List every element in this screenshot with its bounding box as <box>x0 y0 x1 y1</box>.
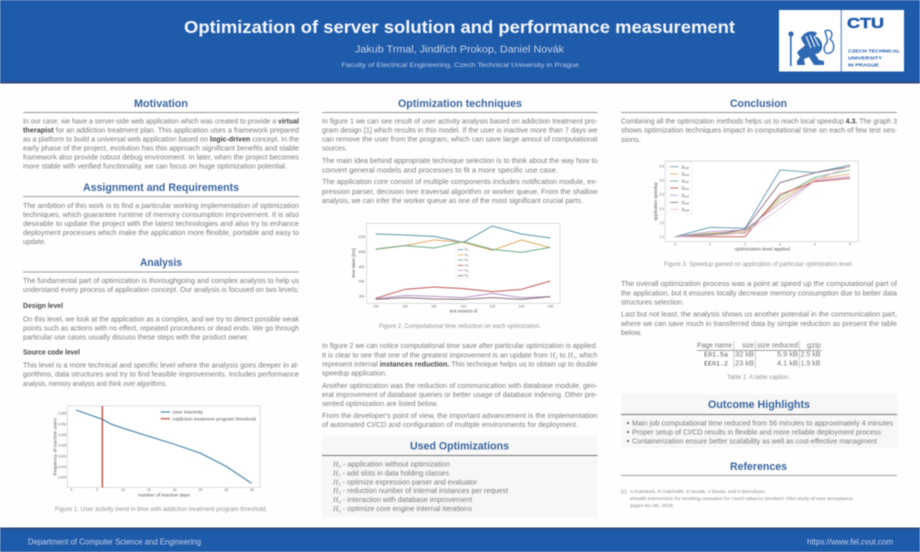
chart 1 axis labels: 15 <box>147 488 151 492</box>
chart 2 legend <box>456 247 469 278</box>
chart 1 axis labels: 10 <box>121 488 125 492</box>
caption: figure 3: Figure 3. Speedup gained on application of particular optimization level. <box>664 261 853 268</box>
text block: figure 2 discussion: It is clear to see that one of the greatest improvement is an update from H₂ to H₃, which <box>322 351 598 359</box>
chart 1 legend: User inactivity <box>172 410 204 415</box>
text block: conclusion discussion: where we can save much in transferred data by simple reduction as present the table <box>620 321 897 328</box>
table: page sizes: E01.5a <box>704 352 728 358</box>
chart 2 axis labels: 142 <box>461 304 466 308</box>
text block: conclusion intro <box>621 118 898 144</box>
text block: conclusion discussion: The overall optimization process was a point at speed up the computational part of <box>621 281 897 288</box>
chart 2 axis labels: 140 <box>402 304 408 308</box>
authors: Jakub Trmal, Jindřich Prokop, Daniel Novák <box>355 44 565 56</box>
chart 2 axis labels: 800 <box>359 265 365 269</box>
chart 2 legend: H₂ <box>465 258 469 262</box>
list: outcomes: Main job computational time reduced from 56 minutes to approximately 4 minutes <box>632 420 894 427</box>
chart 2 axis labels: 1000 <box>358 250 366 254</box>
chart 1 axis labels: 0.030 <box>58 444 67 448</box>
chart 1 data line <box>76 410 252 483</box>
text block: reference list: [1] <box>621 489 627 495</box>
chart 2 axis labels: 141 <box>431 304 437 308</box>
text block: optimization intro <box>322 118 598 205</box>
chart 2 legend: H₁ <box>465 253 468 257</box>
chart 1 axis labels <box>52 412 254 497</box>
logo university name: CZECH TECHNICAL <box>848 48 901 54</box>
chart 3 axis labels: 5 <box>849 242 851 246</box>
chart 3 legend: S₁₄₄ <box>681 200 689 205</box>
logo university name: UNIVERSITY <box>848 56 882 60</box>
chart 3 legend: S₁₄₅ <box>681 207 689 212</box>
chart 3 axis labels: 3.0 <box>659 179 664 183</box>
text block: optimization intro: In figure 1 we can see result of user activity analysis based on addiction treatment pro- <box>322 118 598 125</box>
panel: motivation <box>23 98 300 170</box>
logo university name: IN PRAGUE <box>848 62 879 68</box>
list: outcomes <box>627 420 894 445</box>
chart 1 axis labels: 35 <box>250 488 254 492</box>
footer band <box>0 528 920 552</box>
chart 3 legend: S₁₃₉ <box>681 164 689 169</box>
chart: computational time per test session <box>351 223 560 314</box>
caption: figure 1: Figure 1. User activity trend in time with addiction treatment program threshold. <box>55 506 267 513</box>
heading: outcome highlights: Outcome Highlights <box>708 399 810 411</box>
panel: optimization techniques <box>322 98 598 205</box>
chart 2 axis labels: 144 <box>519 304 524 308</box>
chart 3 legend: S₁₄₃ <box>681 193 689 198</box>
text block: optimization intro: sources. <box>322 146 347 152</box>
text block: analysis intro <box>23 278 300 294</box>
list: optimizations: H₂ - optimize expression parser and evaluator <box>332 478 478 486</box>
text block: design level: particular use cases usually discuss these steps with the product owner. <box>23 335 249 342</box>
chart 2 legend: H₄ <box>465 268 469 272</box>
text block: assignment: desirable to update the project with the latest technologies and also try to enhance <box>23 221 299 228</box>
text block: optimization intro: gram design [1] which results in this model. If the user is inactive more than 7 days we <box>322 127 598 134</box>
subheading: design level: Design level <box>23 303 63 310</box>
text block: figure 2 discussion: From the developer's point of view, the important advancement is the implementation <box>322 413 598 420</box>
text block: analysis intro: understand every process of application concept. Our analysis is focused on two levels: <box>23 287 299 294</box>
table: page sizes: 1.9 kB <box>800 358 820 368</box>
footer: url: https://www.fel.cvut.com <box>807 538 893 547</box>
chart 1 axis labels: 5 <box>96 488 98 492</box>
icon: lion <box>788 30 834 66</box>
chart 3 legend: S₁₄₂ <box>681 186 689 191</box>
panel: outcome highlights <box>621 394 897 448</box>
text block: motivation: therapist for an addiction treatment plan. This application uses a framework prepared <box>23 127 299 134</box>
text block: assignment <box>23 203 299 246</box>
text block: conclusion discussion: the application, but it ensures locally decrease memory consumption due to better data <box>621 290 897 297</box>
caption: table 1: Table 1. A table caption. <box>727 374 790 381</box>
table: page sizes: size reduced <box>757 340 798 350</box>
heading: conclusion: Conclusion <box>730 98 787 110</box>
chart 3 series lines <box>675 165 850 237</box>
heading: analysis: Analysis <box>140 257 182 269</box>
text block: source code level: analysis, memory analysis and think over algorithms. <box>23 381 167 388</box>
chart 1 legend: Addiction treatment program threshold <box>172 416 257 421</box>
chart 3 legend: S₁₄₁ <box>681 179 689 184</box>
chart 3 axis labels: 3 <box>779 242 781 246</box>
text block: figure 2 discussion <box>322 343 598 429</box>
text block: figure 2 discussion: sented optimization are listed below. <box>322 401 438 408</box>
chart 3 axis labels: 2.0 <box>659 207 664 211</box>
chart 2 axis labels: time taken [ms] <box>351 248 356 278</box>
text block: optimization intro: can remove the user from the program, which can save large amout of computational <box>322 137 598 144</box>
text block: reference list: ehealth intervention for smoking cessation for czech tobacco smokers: Pilot study of user acceptance. <box>630 496 854 502</box>
chart 2 axis labels: 400 <box>359 295 365 299</box>
table: page sizes: Page name <box>697 340 732 350</box>
text block: assignment: deployment processes which make the application more flexible, portable and easy to <box>23 230 299 237</box>
heading: optimization techniques: Optimization techniques <box>398 98 522 110</box>
caption: figure 2: Figure 2. Computational time reduction on each optimization. <box>379 323 541 330</box>
text block: figure 2 discussion: of automated CI/CD and configuration of multiple environments for deployment. <box>322 422 578 429</box>
panel: references <box>621 461 897 509</box>
table: page sizes: 23 kB <box>735 358 754 368</box>
text block: design level: On this level, we look at the application as a complex, and we try to detect possible weak <box>23 316 299 323</box>
text block: motivation: In our case, we have a server-side web application which was created to provide a virtual <box>23 118 299 125</box>
text block: optimization intro: pression parser, decision tree traversal algorithm or worker queue. From the shallow <box>322 189 598 196</box>
chart 3 axis labels: 1.5 <box>659 221 664 225</box>
chart 2 axis labels: 145 <box>548 304 553 308</box>
text block: conclusion discussion: Last but not least, the analysis shows us another potential in the communication part, <box>621 312 897 318</box>
text block: figure 2 discussion: Another optimization was the reduction of communication with database module, gen- <box>322 383 598 390</box>
text block: conclusion discussion: below. <box>621 330 642 337</box>
list: optimizations <box>332 460 508 513</box>
chart 3 axis labels: 0 <box>674 242 676 246</box>
chart 3 axis labels: 3.5 <box>659 165 664 169</box>
list: optimizations: H₄ - interaction with database improvement <box>332 496 472 504</box>
text block: analysis intro: The fundamental part of optimization is thoroughgoing and complex analysis to help us <box>23 278 300 285</box>
text block: motivation: as a platform to build a universal web application based on logic-driven concept. In the <box>23 137 299 144</box>
panel: assignment and requirements <box>23 182 299 246</box>
table: page sizes: 32 kB <box>735 350 754 358</box>
text block: assignment: The ambition of this work is to find a particular working implementation of optimization <box>23 203 299 210</box>
table: page sizes: 5.9 kB <box>777 350 798 358</box>
text block: conclusion discussion: structures selection. <box>621 299 684 306</box>
chart 3 axis labels: 4 <box>814 242 816 246</box>
text block: conclusion intro: Combining all the optimization methods helps us to reach local speedup 4.3. The graph 3 <box>621 118 897 125</box>
table: page sizes <box>697 340 822 368</box>
logo: CTU <box>779 10 904 72</box>
logo wordmark: CTU <box>847 15 884 32</box>
chart 2 legend: H₅ <box>465 274 469 278</box>
chart 2 series lines <box>376 226 550 299</box>
chart 3 axis labels: optimization level applied <box>735 247 791 252</box>
text block: assignment: update. <box>23 239 46 246</box>
chart 2 axis labels: 143 <box>490 304 495 308</box>
chart 3 legend <box>667 162 692 214</box>
chart 1 axis labels: 0.060 <box>58 412 67 416</box>
list: optimizations: H₃ - reduction number of internal instances per request <box>332 487 508 495</box>
table: page sizes: size <box>742 340 754 350</box>
logo university name <box>848 48 901 68</box>
list: optimizations: H₅ - optimize core engine internal iterations <box>332 505 473 513</box>
text block: conclusion intro: shows optimization techniques impact in computational time on each of few test ses- <box>621 127 898 134</box>
chart 3 legend: S₁₄₀ <box>681 172 689 177</box>
footer: department: Department of Computer Science and Engineering <box>28 538 201 547</box>
chart 1 axis labels: 0.050 <box>58 422 67 426</box>
text block: reference list <box>621 489 854 509</box>
chart 1 axis labels: 30 <box>224 488 228 492</box>
chart 1 axis labels: 20 <box>173 488 177 492</box>
text block: reference list: pages 81–85, 2018. <box>630 503 674 509</box>
chart 1 axis labels: frequency of inactive users <box>52 418 57 475</box>
table: page sizes: 4.1 kB <box>777 358 798 368</box>
list: outcomes: Containerization ensure better scalability as well as cost-effective managment <box>632 438 877 445</box>
panel: conclusion <box>621 98 898 144</box>
text block: figure 2 discussion: represent internal instances reduction. This technique helps us to obtain up to double <box>322 361 598 368</box>
text block: source code level: gorithms, data structures and try to find feasible improvements. Includes performance <box>23 372 299 379</box>
text block: design level <box>23 316 299 342</box>
chart 3 axis labels: 1 <box>709 242 711 246</box>
chart: speedup per optimization level <box>653 161 858 252</box>
list: optimizations: H₁ - add slots in data holding classes <box>332 469 449 477</box>
chart 3 axis labels: application speedup <box>653 181 658 221</box>
list: outcomes: Proper setup of CI/CD results in flexible and more reliable deployment process <box>632 429 882 436</box>
chart 3 axis labels: 1.0 <box>659 235 664 239</box>
panel: used optimizations <box>322 436 598 517</box>
text block: motivation: more stable with verified functionality, we can focus on huge optimization potential. <box>23 163 287 170</box>
chart 1 axis labels: 0.040 <box>58 433 67 437</box>
chart 3 axis labels: 2.5 <box>659 193 664 197</box>
text block: motivation: framework also provide robust debug environment. In later, when the project becomes <box>23 154 300 161</box>
text block: figure 2 discussion: eral improvement of database queries or better usage of database indexing. Other pre- <box>322 392 598 399</box>
chart 3 axis labels <box>653 165 851 252</box>
chart 2 axis labels <box>351 235 553 314</box>
chart 1 axis labels: number of inactive days <box>138 492 190 497</box>
chart 2 legend: H₀ <box>465 248 469 252</box>
chart 1 threshold line <box>100 406 104 487</box>
chart 1 axis labels: 0.020 <box>58 454 67 458</box>
heading: used optimizations: Used Optimizations <box>410 440 509 452</box>
table: page sizes: gzip <box>807 340 821 350</box>
text block: source code level <box>23 362 300 388</box>
list: optimizations: H₀ - application without optimization <box>332 460 450 468</box>
heading: assignment and requirements: Assignment and Requirements <box>83 182 239 194</box>
panel: analysis <box>23 257 300 388</box>
chart 2 legend: H₃ <box>465 263 469 267</box>
text block: figure 2 discussion: In figure 2 we can notice computational time save after particular optimization is applied. <box>322 343 598 350</box>
table: page sizes: 2.5 kB <box>800 350 820 358</box>
chart 2 axis labels: 1200 <box>358 235 366 239</box>
text block: conclusion discussion <box>620 281 897 337</box>
text block: design level: points such as actions with no effect, repeated procedures or dead ends. We go through <box>23 326 299 332</box>
chart 1 legend <box>161 410 257 421</box>
text block: optimization intro: The application core consist of multiple components includes notification module, ex- <box>322 179 598 186</box>
chart 2 axis labels: test session id <box>450 309 478 314</box>
chart 1 axis labels: 0.010 <box>58 465 67 469</box>
table: page sizes: EE01.2 <box>704 360 728 368</box>
heading: motivation: Motivation <box>134 98 188 110</box>
chart 3 axis labels: 2 <box>744 242 746 246</box>
text block: assignment: techniques, which guarantee runtime of memory consumption improvement. It is also <box>23 212 299 219</box>
chart: user inactivity line chart <box>52 406 260 497</box>
heading: references: References <box>730 461 787 473</box>
chart 2 axis labels: 139 <box>373 304 379 308</box>
header band <box>0 0 920 84</box>
subheading: source code level: Source code level <box>23 350 80 356</box>
chart 1 axis labels: 0 <box>70 488 72 492</box>
text block: source code level: This level is a more technical and specific level where the analysis goes deeper in al- <box>23 362 300 369</box>
text block: conclusion intro: sions. <box>621 137 641 144</box>
chart 2 axis labels: 600 <box>359 280 365 284</box>
text block: motivation: early phase of the project, evolution has this approach significant benefits and stable <box>23 146 299 152</box>
title: Optimization of server solution and performance measurement <box>184 17 735 37</box>
chart 1 axis labels: 25 <box>198 488 202 492</box>
affiliation: Faculty of Electrical Engineering, Czech Technical University in Prague <box>342 62 579 69</box>
text block: optimization intro: analysis, we can infer the worker queue as one of the most significant crucial parts. <box>322 198 583 205</box>
text block: optimization intro: The main idea behind appropriate technique selection is to think about the way how to <box>322 158 598 165</box>
text block: figure 2 discussion: speedup application. <box>322 370 387 378</box>
chart 1 axis labels: 0.000 <box>58 476 67 480</box>
text block: optimization intro: convert general models and processes to fit a more specific use case. <box>322 167 558 174</box>
text block: reference list: A Kuthánek, R Gabrhelík, D Novák, V Burda, and H Brendryen. <box>630 489 766 495</box>
text block: motivation <box>23 118 300 170</box>
